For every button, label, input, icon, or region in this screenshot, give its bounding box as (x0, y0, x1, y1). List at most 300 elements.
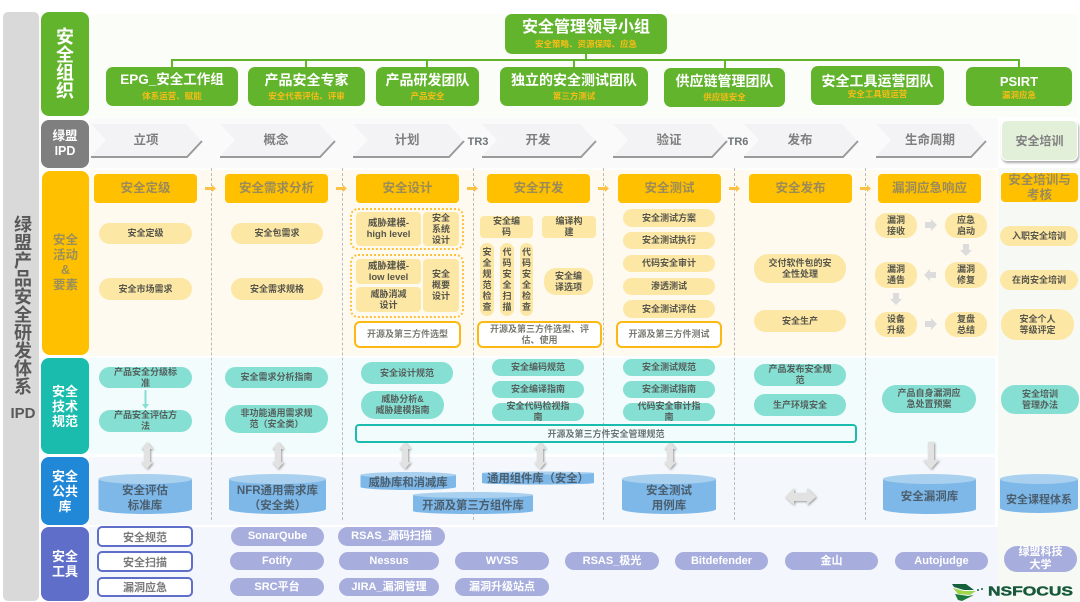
chevron: plan (353, 124, 464, 157)
org box: product security experts: 产品安全专家 (264, 72, 348, 88)
box: security overview design: 安全 (432, 269, 450, 279)
cylinder: security course system: 安全课程体系 (1006, 492, 1072, 506)
pill: product security evaluation method: 法 (141, 421, 150, 431)
row heading: security organisation: 安 (56, 27, 74, 47)
cylinder: security assessment standards library: 标准库 (128, 498, 163, 512)
tool pill: Kingsoft: 金山 (820, 554, 842, 566)
chevron: development (482, 124, 596, 157)
pill: product security evaluation method (99, 410, 192, 432)
chevron: project initiation: 立项 (133, 132, 159, 147)
pill: secure compile options (544, 268, 593, 295)
tool pill: JIRA vulnerability management: JIRA_漏洞管理 (351, 580, 427, 592)
chevron: verification: 验证 (656, 132, 682, 147)
pill: product vulnerability response plan: 急处置预案 (906, 399, 952, 409)
double arrow: horizontal library exchange (785, 488, 816, 505)
org box: product R&D team: 产品研发团队 (386, 72, 470, 88)
training heading box (1001, 120, 1078, 161)
pill: production environment security (754, 394, 846, 416)
pill: secure production: 安全生产 (782, 316, 818, 326)
pill: secure compile guide (492, 381, 584, 398)
chevron: verification (613, 124, 727, 157)
chevron: life cycle: 生命周期 (905, 132, 955, 147)
chevron: release: 发布 (787, 132, 813, 147)
title: vertical system name: 发 (14, 341, 32, 361)
pill: non-functional requirement specification (225, 405, 328, 433)
pill: delivery package security handling (754, 254, 846, 283)
pill: code security audit guide: 代码安全审计指 (637, 401, 700, 411)
pill: code security audit: 代码安全审计 (642, 258, 696, 268)
vertical pill: code security scan: 扫 (502, 290, 512, 300)
cylinder: NFR requirement library: （安全类） (249, 498, 306, 512)
tool pill: SRC platform: SRC平台 (254, 580, 300, 592)
pill: secure compile options: 安全编 (555, 270, 582, 280)
chevron: development: 开发 (525, 132, 551, 147)
activity header: vulnerability emergency response: 漏洞应急响应 (892, 181, 967, 195)
cylinder: open source and third party component library: 开源及第三方组件库 (422, 498, 524, 512)
pill: emergency start: 启动 (957, 226, 975, 236)
pill: security grading (99, 223, 192, 244)
org box: security tool operations team: 安全工具链运营 (848, 88, 907, 98)
tool pill: Kingsoft (785, 552, 878, 570)
outlined box: open source security management specification: 开源及第三方件安全管理规范 (547, 429, 664, 439)
pill: security grading: 安全定级 (127, 228, 164, 238)
tool category: vulnerability response (97, 577, 193, 597)
box: secure coding: 码 (502, 227, 511, 237)
cylinder: threat and mitigation library: 威胁库和消减库 (368, 475, 448, 489)
org box: product security experts (248, 67, 365, 106)
org box: EPG security working group: 体系运营、赋能 (142, 91, 202, 101)
title: vertical system name: 体 (14, 359, 32, 379)
box: security system design (423, 212, 459, 246)
activity header: security training and assessment (1001, 173, 1078, 202)
title: vertical system name: 研 (14, 323, 32, 343)
org box: supply chain management team (664, 68, 785, 107)
pill: code security audit guide: 南 (664, 412, 674, 422)
title: vertical system name: 品 (14, 269, 32, 289)
pill: security package requirements: 安全包需求 (254, 228, 300, 238)
tool pill: Nessus: Nessus (369, 554, 409, 566)
vertical pill: security standard check: 检 (482, 290, 492, 300)
cylinder: security vulnerability library (883, 474, 976, 514)
org box: PSIRT (966, 67, 1072, 106)
pill: vulnerability advisory (875, 262, 917, 288)
title: vertical system name: 产 (14, 251, 32, 271)
row heading: security technical standards (41, 358, 89, 454)
tool category: security scan: 安全扫描 (123, 556, 167, 568)
vertical pill: code security scan (500, 243, 514, 316)
pill: non-functional requirement specification: 范（安全类） (249, 419, 304, 429)
cylinder: NFR requirement library: NFR通用需求库 (237, 483, 319, 497)
activity header: security grading: 安全定级 (120, 181, 170, 195)
vertical pill: code security scan: 安 (502, 268, 512, 278)
activity header: security grading (94, 174, 197, 203)
vertical pill: code security check: 安 (522, 268, 531, 278)
panel: training column background (998, 168, 1080, 602)
pill: threat analysis and modeling guide: 威胁分析& (381, 394, 424, 404)
box: compile and build: 编译构 (555, 216, 582, 226)
tool pill: JIRA vulnerability management (339, 578, 439, 596)
outlined box: open source selection evaluation use: 开源及第三方件选型、评 (490, 324, 589, 334)
pill: product release security specification (754, 364, 846, 386)
pill: vulnerability intake: 漏洞 (887, 214, 905, 224)
box: security system design: 系统 (432, 224, 450, 234)
chevron: life cycle (876, 124, 986, 157)
pill: device upgrade: 升级 (887, 324, 905, 334)
pill: secure code review guide: 南 (533, 412, 542, 422)
pill: security requirement analysis guide: 安全需求分析指南 (240, 372, 312, 382)
pill: production environment security: 生产环境安全 (773, 400, 827, 410)
pill: onboarding security training: 入职安全培训 (1012, 230, 1066, 240)
box: threat modeling low level (356, 259, 421, 284)
cylinder: NFR requirement library (229, 474, 326, 514)
vertical pill: security standard check: 规 (482, 268, 492, 278)
box: threat modeling low level: low level (369, 272, 408, 282)
org box: PSIRT: 漏洞应急 (1002, 90, 1036, 100)
cylinder: security vulnerability library: 安全漏洞库 (901, 489, 959, 503)
pill: vulnerability advisory: 漏洞 (887, 264, 905, 274)
double arrows: standards to libraries (141, 442, 676, 469)
title: vertical system name: 系 (14, 377, 32, 397)
pill: security test evaluation: 安全测试评估 (642, 304, 696, 314)
pill: security design specification (361, 362, 453, 384)
pill: security test plan (623, 209, 715, 227)
cylinder: security test case library (622, 474, 716, 514)
vertical pill: security standard check (480, 243, 494, 316)
org box: security management leadership group (505, 14, 667, 54)
pill: post-incident review: 总结 (957, 324, 975, 334)
pill: security requirement specification: 安全需求规格 (250, 284, 304, 294)
pill: product security grading standard: 产品安全分级标 (114, 366, 177, 376)
dotted group: high level design (350, 208, 464, 250)
pill: secure coding specification (492, 359, 584, 376)
org box: product R&D team: 产品安全 (410, 91, 444, 101)
panel: public library row background (89, 457, 995, 525)
panel: organisation row background (89, 14, 1078, 117)
tool pill: Bitdefender (675, 552, 768, 570)
outlined box: open source security management specification (355, 424, 857, 443)
vertical pill: code security check (520, 243, 533, 316)
pill: emergency start (945, 213, 987, 238)
org chart connector line: trunk (171, 59, 1020, 61)
row heading: security public library: 库 (58, 498, 72, 514)
tool pill: NSFOCUS university: 绿盟科技 (1018, 546, 1062, 558)
tool pill: Autojudge: Autojudge (914, 554, 969, 566)
title: vertical system name: 盟 (14, 233, 32, 253)
tool pill: RSAS Jiguang: RSAS_极光 (583, 554, 641, 566)
row heading: security activities and elements: 活动 (53, 248, 78, 262)
pill: code security audit guide (623, 403, 715, 421)
pill: security test plan: 安全测试方案 (642, 212, 696, 222)
chevron: project initiation (91, 124, 202, 157)
box: threat mitigation design: 设计 (379, 300, 398, 310)
activity header: security training and assessment: 考核 (1027, 188, 1052, 202)
arrow: vulnerability plan to vulnerability library (923, 442, 939, 469)
pill: secure production (754, 310, 846, 332)
pill: delivery package security handling: 交付软件包的安 (768, 258, 832, 268)
label: TR6 milestone: TR6 (728, 136, 748, 148)
cylinder: common component library: 通用组件库（安全） (487, 471, 589, 485)
pill: product release security specification: 范 (795, 375, 804, 385)
pill: onboarding security training (1000, 226, 1078, 246)
pill: security test guide: 安全测试指南 (642, 384, 696, 394)
tool pill: WVSS (455, 552, 549, 570)
tool pill: NSFOCUS university (1004, 546, 1077, 572)
box: security system design: 安全 (432, 212, 450, 222)
org box: supply chain management team: 供应链安全 (703, 92, 746, 102)
activity header: security testing: 安全测试 (644, 181, 694, 195)
activity header: security design: 安全设计 (382, 181, 432, 195)
pill: vulnerability fix: 修复 (957, 275, 975, 285)
row heading: security technical standards: 技术 (52, 398, 78, 414)
outlined box: open source selection: 开源及第三方件选型 (367, 329, 448, 339)
pill: security test guide (623, 381, 715, 398)
cylinder: security assessment standards library (98, 474, 192, 514)
pill: threat analysis and modeling guide: 威胁建模指南 (375, 405, 430, 415)
activity header: security requirements analysis: 安全需求分析 (239, 181, 314, 195)
pill: secure compile guide: 安全编译指南 (511, 384, 565, 394)
pill: security test execution: 安全测试执行 (642, 235, 696, 245)
dotted group: low level design (350, 254, 464, 318)
panel: IPD phase row background (89, 118, 998, 168)
row heading: security activities and elements (42, 171, 89, 355)
title: vertical system name: 安 (14, 287, 32, 307)
pill: product vulnerability response plan: 产品自身漏洞应 (897, 388, 960, 398)
chevron: release (744, 124, 858, 157)
pill: security training management rules: 安全培训 (1022, 388, 1058, 398)
org box: EPG security working group (106, 67, 238, 106)
row heading: security public library: 公共 (52, 484, 78, 498)
row heading: security activities and elements: 安全 (53, 233, 78, 247)
row heading: NSFOCUS IPD: IPD (55, 144, 75, 158)
activity header: security release: 安全发布 (775, 181, 826, 195)
title: vertical system name: 全 (14, 305, 32, 325)
pill: product security grading standard: 准 (141, 378, 150, 388)
row heading: NSFOCUS IPD (41, 120, 89, 168)
row heading: security activities and elements: & (61, 263, 70, 277)
pill: on-the-job security training (1000, 270, 1078, 290)
pill: security requirement specification (231, 278, 323, 300)
tool pill: Fotify (230, 552, 324, 570)
tool pill: RSAS Jiguang (565, 552, 659, 570)
chevron: concept (220, 124, 335, 157)
tool pill: Autojudge (895, 552, 988, 570)
pill: device upgrade: 设备 (887, 314, 905, 324)
tool pill: vulnerability upgrade site: 漏洞升级站点 (469, 580, 535, 592)
activity header: security development (487, 174, 590, 203)
box: secure coding: 安全编 (493, 216, 520, 226)
pill: vulnerability intake: 接收 (887, 226, 905, 236)
org box: product R&D team (376, 67, 479, 106)
pill: security personnel level rating: 等级评定 (1019, 324, 1056, 334)
tool pill: WVSS: WVSS (486, 554, 518, 566)
row heading: security tools (41, 527, 89, 601)
pill: post-incident review (945, 312, 987, 337)
chevron: concept: 概念 (263, 132, 289, 147)
row heading: security tools: 工具 (52, 564, 78, 579)
pill: non-functional requirement specification: 非功能通用需求规 (240, 408, 312, 418)
row heading: security tools: 安全 (52, 549, 78, 564)
row heading: security activities and elements: 要素 (53, 278, 78, 292)
pill: security test specification (623, 359, 715, 376)
tool pill: Fotify: Fotify (262, 554, 292, 566)
pill: security market requirements (99, 278, 192, 300)
row heading: security organisation: 组 (56, 63, 74, 83)
org box: product security experts: 安全代表评估、评审 (268, 91, 345, 101)
pill: penetration test: 渗透测试 (651, 281, 687, 291)
org box: PSIRT: PSIRT (1000, 74, 1038, 88)
pill: security test evaluation (623, 300, 715, 318)
org box: supply chain management team: 供应链管理团队 (676, 73, 774, 89)
logo: NSFOCUS: NSFOCUS (988, 584, 1073, 598)
tool pill: vulnerability upgrade site (455, 578, 549, 596)
column dividers (211, 168, 212, 520)
activity header: security training and assessment: 安全培训与 (1008, 172, 1071, 186)
vertical pill: code security check: 码 (522, 258, 531, 268)
panel: left title bar (3, 12, 39, 601)
vertical pill: security standard check: 安 (482, 246, 492, 256)
vertical pill: code security scan: 描 (502, 302, 512, 312)
box: security overview design: 概要 (432, 280, 450, 290)
row heading: security organisation: 织 (56, 81, 74, 101)
pill: post-incident review: 复盘 (957, 314, 975, 324)
pill: code security audit (623, 255, 715, 272)
box: threat mitigation design: 威胁消减 (370, 288, 406, 298)
outlined box: open source selection evaluation use: 估、使用 (521, 334, 558, 344)
box: threat mitigation design (356, 287, 421, 312)
title: vertical system name: 绿 (14, 215, 32, 235)
box: secure coding (480, 216, 533, 238)
org box: security management leadership group: 安全管理领导小组 (522, 18, 650, 36)
pill: security test execution (623, 232, 715, 249)
tool pill: SonarQube: SonarQube (248, 530, 307, 542)
outlined box: open source testing: 开源及第三方件测试 (628, 329, 710, 339)
panel: activities row background (89, 170, 997, 356)
label: TR3 milestone: TR3 (468, 136, 488, 148)
pill: device upgrade (875, 312, 917, 337)
box: compile and build: 建 (564, 227, 574, 237)
org box: security tool operations team (811, 66, 944, 105)
tool pill: RSAS source scan (338, 527, 445, 546)
pill: secure coding specification: 安全编码规范 (511, 362, 565, 372)
vertical pill: security standard check: 全 (482, 258, 492, 268)
pill: secure code review guide: 安全代码检视指 (506, 401, 570, 411)
cylinder: security test case library: 用例库 (652, 498, 687, 512)
vertical pill: code security check: 查 (522, 302, 531, 312)
box: threat modeling high level: high level (367, 229, 410, 240)
pill: product security grading standard (99, 367, 192, 388)
box: threat modeling low level: 威胁建模- (368, 260, 409, 272)
pill: vulnerability advisory: 通告 (887, 275, 905, 285)
pill: secure code review guide (492, 403, 584, 421)
pill: on-the-job security training: 在岗安全培训 (1012, 274, 1066, 284)
tool category: security standard: 安全规范 (123, 532, 167, 544)
box: security overview design (423, 259, 459, 312)
tool category: security scan (97, 551, 193, 572)
tool pill: SonarQube (231, 527, 324, 546)
org box: independent security testing team: 第三方测试 (553, 91, 595, 101)
pill: security test specification: 安全测试规范 (642, 362, 696, 372)
cylinder: security test case library: 安全测试 (646, 483, 692, 497)
pill: security design specification: 安全设计规范 (380, 368, 434, 378)
arrow: standard grading to evaluation (142, 390, 149, 409)
box: threat modeling high level: 威胁建模- (368, 218, 409, 229)
cylinder: security assessment standards library: 安全评估 (122, 483, 168, 497)
tool pill: SRC platform (230, 578, 324, 596)
activity header: security release (749, 174, 852, 203)
org box: security management leadership group: 安全策略、资源保障、应急 (535, 38, 637, 48)
vertical pill: code security scan: 代 (502, 246, 512, 256)
pill: security personnel level rating: 安全个人 (1019, 314, 1056, 324)
training heading box: 安全培训 (1015, 134, 1064, 148)
box: threat modeling high level (356, 212, 421, 246)
vertical pill: security standard check: 查 (482, 302, 492, 312)
box: compile and build (542, 216, 596, 238)
outlined box: open source selection evaluation use (477, 321, 602, 348)
pill: emergency start: 应急 (957, 214, 975, 224)
vertical pill: code security check: 全 (522, 280, 531, 290)
pill: product release security specification: 产品发布安全规 (768, 364, 832, 374)
chevron: plan: 计划 (394, 132, 420, 147)
vertical pill: code security scan: 全 (502, 280, 512, 290)
cylinder: security course system (1000, 474, 1078, 513)
pill: secure compile options: 译选项 (555, 282, 582, 292)
row heading: security organisation (41, 12, 89, 116)
vertical pill: code security check: 检 (522, 290, 531, 300)
pill: security market requirements: 安全市场需求 (118, 284, 172, 294)
activity header: security requirements analysis (225, 174, 328, 203)
pill: security training management rules: 管理办法 (1022, 400, 1058, 410)
tool category: security standard (97, 526, 193, 547)
panel: technical standards row background (89, 358, 995, 454)
pill: delivery package security handling: 全性处理 (782, 268, 818, 278)
title: vertical system name: IPD (10, 405, 36, 422)
vertical pill: code security scan: 码 (502, 258, 512, 268)
box: security overview design: 设计 (432, 291, 450, 301)
tool pill: Nessus (339, 552, 439, 570)
box: security system design: 设计 (432, 234, 450, 244)
row heading: security public library (41, 457, 89, 525)
panel: tools row background (89, 527, 999, 602)
logo: NSFOCUS (952, 584, 1073, 601)
row heading: security organisation: 全 (56, 45, 74, 65)
org box: security tool operations team: 安全工具运营团队 (822, 72, 934, 88)
outlined box: open source testing (616, 321, 722, 348)
pill: vulnerability fix (945, 262, 987, 288)
title: vertical system name (10, 215, 36, 422)
row heading: security technical standards: 规范 (52, 414, 78, 428)
pill: vulnerability fix: 漏洞 (957, 264, 975, 274)
cylinder: threat and mitigation library (360, 472, 456, 490)
org box: EPG security working group: EPG_安全工作组 (120, 72, 224, 87)
pill: threat analysis and modeling guide (361, 391, 444, 419)
arrows: vulnerability response flow (890, 219, 972, 330)
tool category: vulnerability response: 漏洞应急 (123, 582, 167, 594)
pill: product vulnerability response plan (882, 385, 976, 413)
pill: vulnerability intake (875, 213, 917, 238)
activity header: security design (356, 174, 459, 203)
row heading: NSFOCUS IPD: 绿盟 (52, 129, 78, 143)
row heading: security public library: 安全 (52, 468, 78, 484)
pill: security requirement analysis guide (225, 367, 328, 388)
activity header: security development: 安全开发 (513, 181, 564, 195)
tool pill: NSFOCUS university: 大学 (1030, 559, 1052, 571)
org box: independent security testing team (500, 67, 648, 106)
activity header: vulnerability emergency response (878, 174, 981, 203)
tool pill: RSAS source scan: RSAS_源码扫描 (351, 530, 432, 542)
outlined box: open source selection (354, 321, 461, 348)
activity header: security testing (618, 174, 721, 203)
row heading: security technical standards: 安全 (52, 384, 78, 398)
